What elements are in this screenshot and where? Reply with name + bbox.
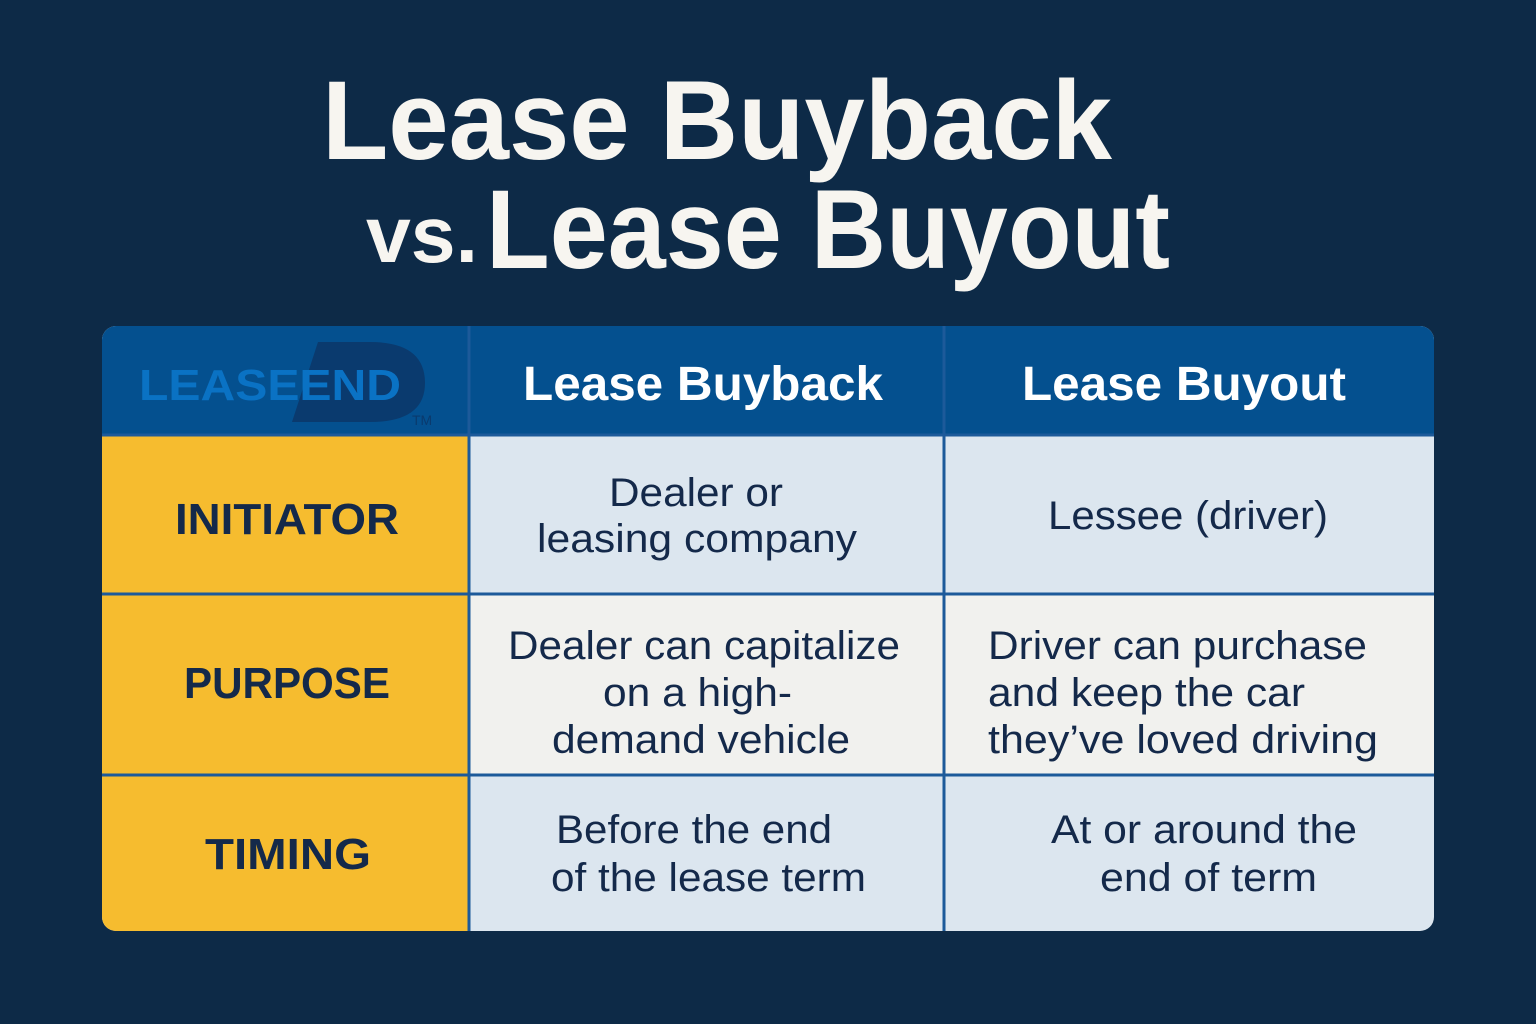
cell text: At or around the <box>1051 808 1357 852</box>
logo: LeaseEnd <box>139 342 432 428</box>
row labels: TIMING <box>205 830 371 879</box>
column headers <box>523 358 1346 411</box>
cell text: they’ve loved driving <box>988 718 1378 762</box>
cell text: Dealer or <box>609 471 783 515</box>
logo: LeaseEnd: LEASEEND <box>139 361 401 410</box>
cell text: of the lease term <box>551 856 866 900</box>
title <box>322 58 1170 292</box>
cell text: Dealer can capitalize <box>508 624 900 668</box>
column headers: Lease Buyback <box>523 358 883 411</box>
row labels: INITIATOR <box>175 495 399 544</box>
comparison table <box>102 326 1434 931</box>
row labels: PURPOSE <box>184 659 390 708</box>
cell text <box>508 471 1378 900</box>
cell text: end of term <box>1100 856 1317 900</box>
cell text: and keep the car <box>988 671 1305 715</box>
cell text: Lessee (driver) <box>1048 494 1328 538</box>
title: Lease Buyout <box>486 167 1170 292</box>
cell text: demand vehicle <box>552 718 850 762</box>
cell text: Before the end <box>556 808 832 852</box>
cell text: Driver can purchase <box>988 624 1367 668</box>
row labels <box>175 495 399 879</box>
column headers: Lease Buyout <box>1022 358 1346 411</box>
cell text: on a high- <box>603 671 792 715</box>
cell text: leasing company <box>537 517 857 561</box>
logo: LeaseEnd: TM <box>412 412 432 428</box>
title: Lease Buyback <box>322 58 1113 183</box>
title: vs. <box>366 190 478 279</box>
